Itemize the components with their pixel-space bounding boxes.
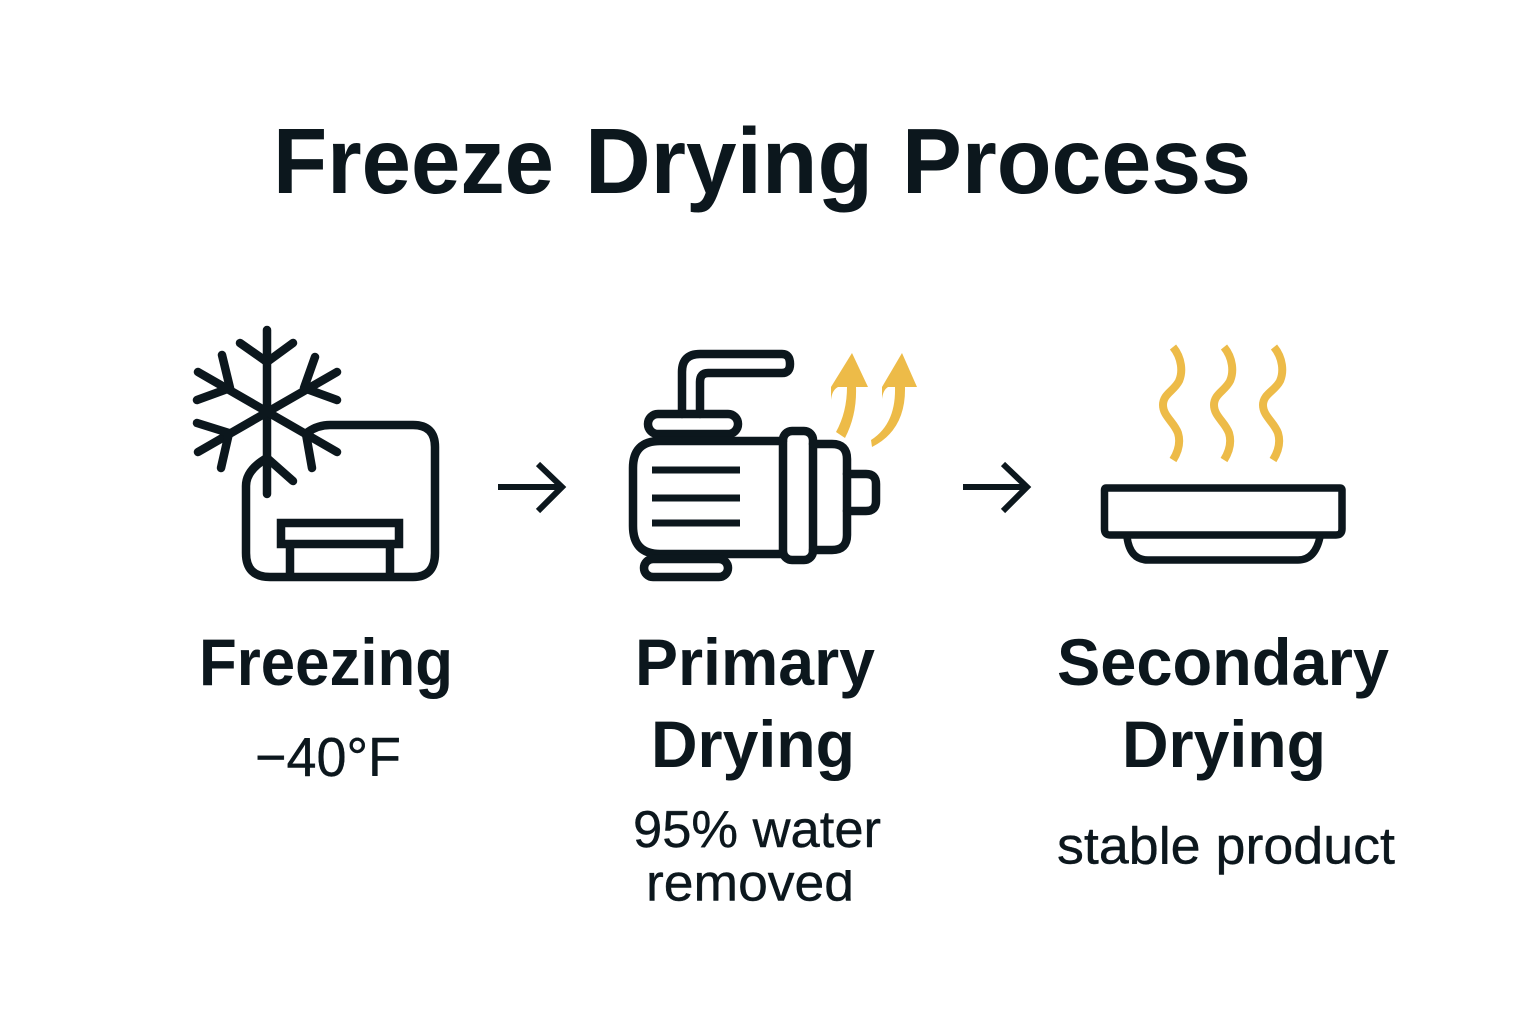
step 2 label: Primary Drying: Drying — [651, 707, 855, 781]
step 1 detail: −40°F — [255, 726, 401, 788]
title: Process — [902, 109, 1251, 213]
icon: heat waves — [1163, 347, 1282, 460]
title: Drying — [585, 109, 873, 213]
step 2 detail: removed — [646, 854, 854, 912]
step 2 detail — [633, 801, 881, 912]
step 2 label: Primary Drying — [633, 625, 881, 912]
title — [273, 109, 1251, 213]
step 3 detail: stable product — [1057, 818, 1396, 876]
icon: tray — [1104, 488, 1342, 560]
step 1 label: Freezing — [199, 625, 453, 788]
icon: vacuum pump — [633, 354, 876, 577]
step 1 label: Freezing: Freezing — [199, 625, 453, 699]
step 3 label: Secondary Drying: Secondary — [1057, 625, 1389, 699]
icon: freezer with snowflake — [197, 330, 435, 577]
title: Freeze — [273, 109, 554, 213]
step 2 detail: 95% water — [633, 801, 881, 859]
arrow: freezing to primary drying — [498, 464, 562, 511]
icon: vapor arrows — [831, 353, 917, 447]
arrow: primary to secondary drying — [963, 464, 1027, 511]
step 3 label: Secondary Drying — [1057, 625, 1396, 876]
step 3 label: Secondary Drying: Drying — [1122, 707, 1326, 781]
step 2 label: Primary Drying: Primary — [635, 625, 875, 699]
